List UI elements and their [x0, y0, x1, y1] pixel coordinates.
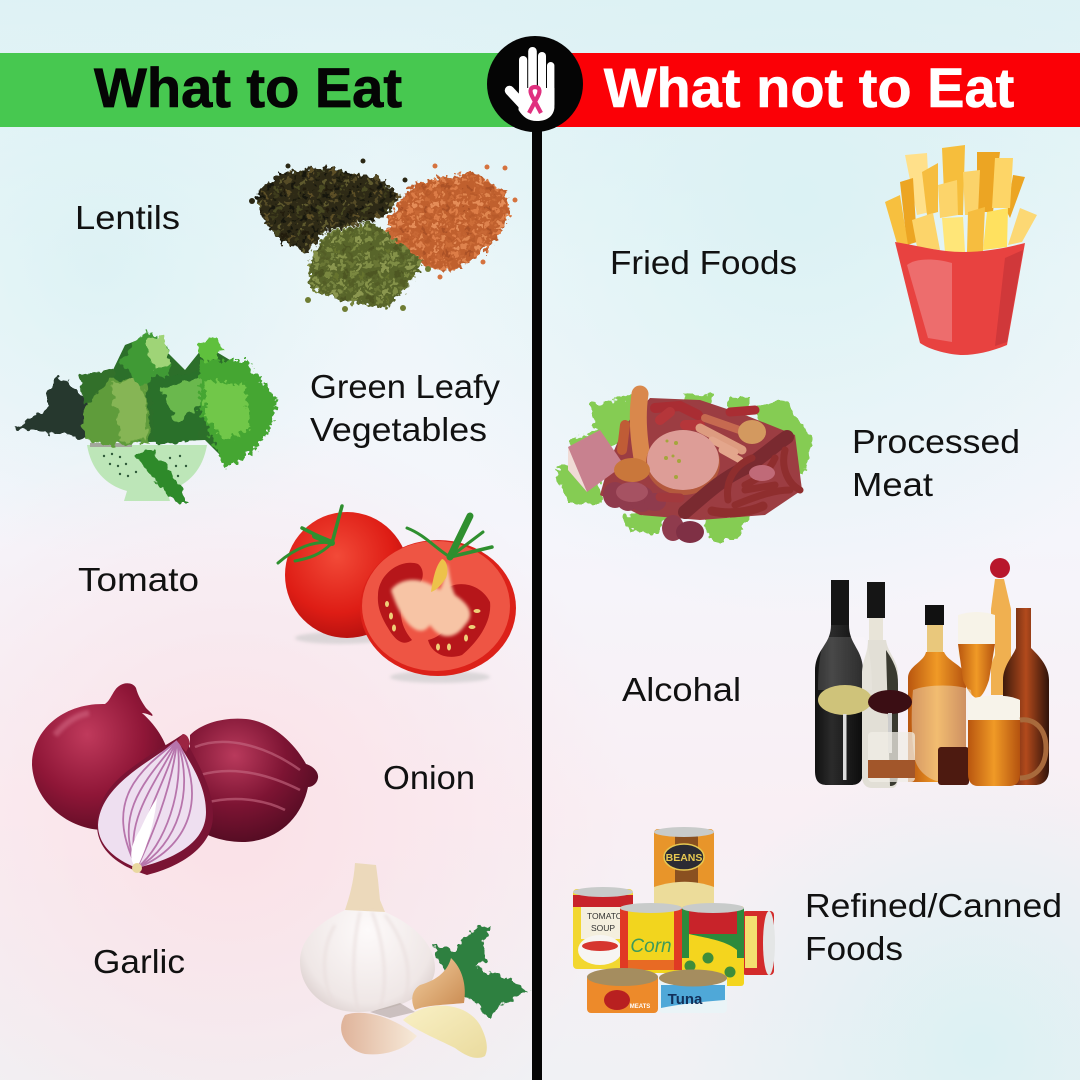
- heading: What not to Eat: What not to Eat: [604, 56, 1014, 119]
- label: Onion: Onion: [383, 759, 475, 796]
- label: Alcohal: Alcohal: [622, 671, 741, 708]
- label: Green Leafy Vegetables: [310, 368, 501, 448]
- can: peas: [682, 903, 744, 986]
- center divider line: [532, 120, 542, 1080]
- label: Garlic: Garlic: [93, 943, 185, 980]
- can: meats tin: [587, 968, 658, 1013]
- label: Green Leafy Vegetables: Vegetables: [310, 411, 487, 448]
- can: tuna tin: Tuna: [668, 991, 703, 1008]
- label: Processed Meat: [852, 423, 1020, 503]
- image: garlic: [300, 863, 530, 1058]
- can: corn: [620, 903, 682, 973]
- can: beans: [654, 827, 714, 910]
- can: tomato soup: [573, 887, 633, 969]
- label: Tomato: Tomato: [78, 561, 199, 598]
- image: onions: [32, 683, 318, 875]
- label: Lentils: Lentils: [75, 199, 180, 236]
- can: tomato soup: TOMATO: [587, 911, 623, 921]
- can: lying red can: [742, 911, 775, 975]
- can: tomato soup: SOUP: [591, 923, 615, 933]
- image: canned foods: [573, 827, 775, 1013]
- can: beans: BEANS: [666, 852, 702, 864]
- image: bottles and glasses: [815, 558, 1049, 788]
- can: meats tin: MEATS: [630, 1004, 650, 1010]
- label: Processed Meat: Processed: [852, 423, 1020, 460]
- label: Green Leafy Vegetables: Green Leafy: [310, 368, 501, 405]
- image: leafy vegetables in colander: [15, 330, 277, 503]
- can: tuna tin: [659, 970, 727, 1013]
- image: processed meat platter: [555, 393, 812, 543]
- can: corn: Corn: [630, 936, 672, 957]
- label: Refined/Canned Foods: Refined/Canned: [805, 887, 1062, 924]
- image: french fries: [885, 145, 1037, 355]
- label: Refined/Canned Foods: [805, 887, 1062, 967]
- header: green banner: [0, 53, 540, 127]
- header: red banner: [540, 53, 1080, 127]
- image: tomatoes: [278, 506, 516, 683]
- label: Processed Meat: Meat: [852, 466, 933, 503]
- icon: hand with pink ribbon: [487, 36, 583, 132]
- label: Refined/Canned Foods: Foods: [805, 930, 903, 967]
- image: lentils: [249, 158, 518, 312]
- heading: What to Eat: What to Eat: [94, 56, 402, 119]
- label: Fried Foods: Fried Foods: [610, 244, 797, 281]
